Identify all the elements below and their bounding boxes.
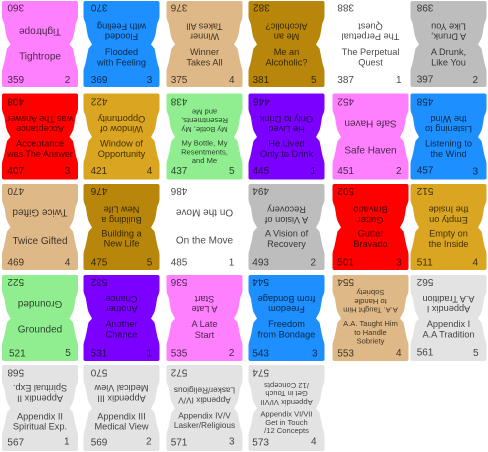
upright text xyxy=(171,319,235,359)
upright text: the Wind xyxy=(430,149,467,159)
upright text: Appendix VI/VII xyxy=(260,409,313,418)
inverted text: Appendix II xyxy=(17,394,63,404)
upright text: Empty on xyxy=(429,228,468,238)
inverted text: 458 xyxy=(416,96,433,107)
upright text xyxy=(252,139,316,177)
upright text: 3 xyxy=(147,75,153,86)
inverted text xyxy=(416,276,475,314)
inverted text: Only to Drink xyxy=(260,114,313,124)
upright text xyxy=(417,228,478,268)
upright text: Get in Touch xyxy=(265,418,308,427)
card: Appendix III Medical View xyxy=(84,365,160,451)
upright text: Winner xyxy=(190,47,219,57)
inverted text xyxy=(90,2,147,42)
upright text xyxy=(337,47,402,86)
inverted text: Empty on xyxy=(429,215,468,225)
upright text xyxy=(337,319,402,359)
upright text xyxy=(171,138,235,177)
upright text: A Late xyxy=(191,319,218,329)
inverted text: Window of xyxy=(100,124,143,134)
inverted text: 522 xyxy=(7,276,24,287)
inverted text xyxy=(252,276,315,314)
upright text: 421 xyxy=(90,166,108,177)
inverted text: Takes All xyxy=(186,21,223,31)
inverted text: 494 xyxy=(252,185,269,196)
inverted text: Sobriety xyxy=(356,288,384,297)
inverted text: 370 xyxy=(90,2,107,12)
card: A Vision of Recovery xyxy=(248,184,324,270)
upright text xyxy=(171,236,235,268)
upright text: 359 xyxy=(7,75,25,86)
upright text: 4 xyxy=(396,348,402,359)
upright text: 535 xyxy=(171,348,188,359)
inverted text: He Lived xyxy=(268,124,305,134)
inverted text: A Drunk, xyxy=(431,32,466,42)
inverted text: Chance xyxy=(106,294,137,304)
upright text xyxy=(91,47,153,86)
inverted text: On the Move xyxy=(175,206,233,218)
upright text: Window of xyxy=(100,139,143,149)
upright text: Flooded xyxy=(105,47,138,57)
inverted text: A.A. Taught Him xyxy=(343,306,398,314)
card: Window of Opportunity xyxy=(84,94,160,180)
upright text: 2 xyxy=(65,75,71,86)
card: Twice Gifted xyxy=(2,184,78,270)
inverted text: 470 xyxy=(7,185,24,196)
upright text: 369 xyxy=(91,75,108,86)
upright text: 381 xyxy=(252,75,270,86)
card: A Drunk, Like You xyxy=(410,1,486,87)
inverted text xyxy=(252,367,313,407)
upright text: On the Move xyxy=(176,236,234,246)
upright text: Safe Haven xyxy=(344,146,397,156)
inverted text: 570 xyxy=(90,367,107,378)
upright text: 437 xyxy=(171,166,188,177)
upright text: Medical View xyxy=(95,421,149,431)
upright text: 457 xyxy=(417,165,434,176)
upright text xyxy=(171,47,235,86)
upright text: 5 xyxy=(311,75,317,86)
upright text: was The Answer xyxy=(6,149,73,159)
inverted text: 452 xyxy=(337,96,354,107)
inverted text xyxy=(170,276,218,314)
inverted text: Grounded xyxy=(18,298,62,309)
upright text: /12 Concepts xyxy=(264,426,309,435)
card: Building a New Life xyxy=(84,184,160,270)
inverted text xyxy=(7,185,68,218)
inverted text: Start xyxy=(194,294,214,304)
card: Appendix VI/VII Get in Touch /12 Concepts xyxy=(248,365,324,451)
inverted text: Appendix III xyxy=(97,394,146,404)
card: The Perpetual Quest xyxy=(332,1,408,87)
upright text xyxy=(252,319,318,359)
upright text: 4 xyxy=(229,75,235,86)
upright text: 469 xyxy=(7,257,25,268)
upright text: 3 xyxy=(396,257,402,268)
inverted text: Appendix I xyxy=(427,304,470,314)
inverted text: My Bottle, My xyxy=(181,125,228,134)
inverted text: 388 xyxy=(337,2,354,12)
card: Appendix I A.A Tradition xyxy=(410,275,486,361)
inverted text: Tightrope xyxy=(19,26,61,37)
upright text: 2 xyxy=(396,166,402,177)
upright text: Appendix II xyxy=(17,411,63,421)
upright text xyxy=(417,319,479,359)
upright text: to Handle xyxy=(354,328,387,337)
upright text xyxy=(7,52,71,86)
upright text: A Vision of xyxy=(265,228,309,238)
inverted text xyxy=(90,185,142,225)
inverted text xyxy=(7,367,67,404)
inverted text xyxy=(416,2,466,42)
upright text: A.A. Taught Him xyxy=(343,319,398,328)
upright text: New Life xyxy=(104,238,139,248)
upright text: Alcoholic? xyxy=(266,58,307,68)
card: Acceptance was The Answer xyxy=(2,94,78,180)
upright text: Gutter xyxy=(358,228,383,238)
inverted text: Safe Haven xyxy=(344,118,397,129)
upright text: 397 xyxy=(417,74,434,86)
inverted text: 572 xyxy=(170,367,187,378)
card: Empty on the Inside xyxy=(410,184,486,270)
upright text: The Perpetual xyxy=(342,47,399,57)
inverted text: Opportunity xyxy=(97,114,145,124)
inverted text xyxy=(252,185,308,225)
inverted text xyxy=(7,276,62,309)
upright text: and Me xyxy=(192,156,217,165)
inverted text: 446 xyxy=(253,96,270,107)
inverted text: Get in Touch xyxy=(265,389,308,398)
inverted text: Alcoholic? xyxy=(266,21,307,31)
card: Me an Alcoholic? xyxy=(248,1,324,87)
inverted text: the Wind xyxy=(430,114,467,124)
inverted text: Gutter xyxy=(358,215,383,225)
inverted text: Appendix IV/V xyxy=(178,395,231,405)
inverted text: Like You xyxy=(431,21,466,31)
card: My Bottle, My Resentments, and Me xyxy=(166,94,242,180)
upright text xyxy=(90,139,153,177)
upright text xyxy=(6,139,73,177)
inverted text: Lasker/Religious xyxy=(174,386,235,396)
upright text: 387 xyxy=(337,75,354,86)
upright text: Appendix IV/V xyxy=(178,411,231,421)
upright text: the Inside xyxy=(429,239,468,249)
inverted text: Winner xyxy=(190,32,219,42)
inverted text xyxy=(416,96,472,134)
upright text: 4 xyxy=(65,257,71,268)
upright text: Quest xyxy=(358,58,383,68)
card: Gutter Bravado xyxy=(332,184,408,270)
upright text xyxy=(7,411,70,448)
inverted text: Freedom xyxy=(268,304,305,314)
inverted text xyxy=(90,367,148,404)
inverted text: 486 xyxy=(170,185,187,196)
card: Flooded with Feeling xyxy=(84,1,160,87)
inverted text: Me an xyxy=(274,32,299,42)
upright text: 475 xyxy=(91,257,108,268)
inverted text: 476 xyxy=(90,185,107,196)
upright text: 1 xyxy=(396,75,402,86)
upright text: A.A Tradition xyxy=(422,330,475,340)
card: Appendix II Spiritual Exp. xyxy=(2,365,78,451)
upright text: 531 xyxy=(90,348,108,359)
upright text xyxy=(91,228,153,268)
upright text xyxy=(91,411,152,448)
inverted text: 382 xyxy=(253,2,270,12)
upright text: 4 xyxy=(472,257,478,268)
upright text: 3 xyxy=(65,166,71,177)
upright text: Takes All xyxy=(186,58,223,68)
inverted text: 568 xyxy=(7,367,24,378)
inverted text: A Late xyxy=(191,304,218,314)
inverted text xyxy=(337,2,399,42)
upright text: 569 xyxy=(91,437,108,448)
upright text: Recovery xyxy=(267,239,306,249)
inverted text xyxy=(170,185,233,218)
inverted text: 398 xyxy=(416,2,433,12)
upright text: 493 xyxy=(252,257,269,268)
upright text: 4 xyxy=(311,436,317,448)
inverted text xyxy=(7,96,74,134)
upright text: Appendix III xyxy=(97,411,146,421)
inverted text: Acceptance xyxy=(16,124,64,134)
upright text xyxy=(337,146,402,177)
card: Grounded xyxy=(2,275,78,361)
inverted text: was The Answer xyxy=(7,114,74,124)
upright text: 5 xyxy=(473,348,479,359)
upright text: 561 xyxy=(417,347,434,358)
inverted text xyxy=(337,185,388,225)
upright text: 2 xyxy=(229,348,235,359)
inverted text: 408 xyxy=(7,96,24,107)
inverted text: 536 xyxy=(170,276,187,287)
upright text: 3 xyxy=(472,166,478,177)
upright text: 5 xyxy=(229,166,235,177)
inverted text: Flooded xyxy=(105,32,138,42)
inverted text: 502 xyxy=(337,185,354,196)
inverted text xyxy=(170,367,235,405)
inverted text xyxy=(253,96,313,134)
inverted text: and Me xyxy=(192,108,217,116)
inverted text: 544 xyxy=(252,276,269,287)
upright text: 2 xyxy=(472,75,478,86)
inverted text: Appendix VI/VII xyxy=(260,398,313,407)
inverted text: /12 Concepts xyxy=(264,381,309,390)
inverted text xyxy=(90,96,145,134)
inverted text xyxy=(416,185,468,225)
inverted text xyxy=(170,96,228,134)
inverted text: Bravado xyxy=(353,205,388,215)
inverted text: 422 xyxy=(90,96,107,107)
upright text: 521 xyxy=(9,348,26,359)
upright text: Sobriety xyxy=(357,336,385,346)
inverted text: Recovery xyxy=(267,205,306,215)
upright text: Grounded xyxy=(18,324,62,336)
upright text: 3 xyxy=(312,348,318,359)
upright text: Appendix I xyxy=(427,319,470,329)
card: Tightrope xyxy=(2,1,78,87)
inverted text: Twice Gifted xyxy=(12,206,68,218)
inverted text: 532 xyxy=(90,276,107,287)
inverted text xyxy=(253,2,307,42)
upright text: Spiritual Exp. xyxy=(13,421,67,431)
card: He Lived Only to Drink xyxy=(248,94,324,180)
upright text: Freedom xyxy=(268,319,305,329)
inverted text: 554 xyxy=(337,276,354,287)
upright text: 511 xyxy=(417,257,433,268)
upright text xyxy=(7,236,71,268)
upright text: Start xyxy=(195,330,215,340)
upright text xyxy=(171,411,235,448)
inverted text: 376 xyxy=(170,2,187,12)
inverted text: 574 xyxy=(252,367,269,378)
inverted text: Resentments, xyxy=(181,116,228,125)
card: A.A. Taught Him to Handle Sobriety xyxy=(332,275,408,361)
upright text: Only to Drink xyxy=(260,149,313,159)
upright text: 5 xyxy=(147,257,153,268)
upright text xyxy=(9,324,71,359)
inverted text: Medical View xyxy=(94,383,148,393)
inverted text: A Vision of xyxy=(264,215,308,225)
upright text: 573 xyxy=(252,437,269,448)
inverted text: 512 xyxy=(416,185,433,196)
inverted text: from Bondage xyxy=(258,294,315,304)
card: Freedom from Bondage xyxy=(248,275,324,361)
upright text xyxy=(417,139,478,177)
upright text: 1 xyxy=(64,436,70,448)
inverted text: 360 xyxy=(7,2,24,12)
upright text: 553 xyxy=(337,348,354,359)
upright text: Opportunity xyxy=(98,149,146,159)
inverted text: 562 xyxy=(416,276,433,287)
card: Safe Haven xyxy=(332,94,408,180)
upright text: Like You xyxy=(431,58,466,68)
upright text: Listening to xyxy=(425,139,472,149)
upright text: My Bottle, My xyxy=(182,138,228,148)
inverted text: A.A Tradition xyxy=(422,294,475,304)
upright text xyxy=(90,319,152,359)
upright text: 567 xyxy=(7,437,25,448)
inverted text: to Handle xyxy=(354,297,387,306)
upright text: Another xyxy=(105,319,138,329)
inverted text: The Perpetual xyxy=(342,32,399,42)
upright text: 501 xyxy=(337,257,354,268)
inverted text xyxy=(7,2,61,37)
upright text: Acceptance xyxy=(16,139,64,149)
upright text xyxy=(337,228,402,268)
upright text: Twice Gifted xyxy=(12,236,68,247)
inverted text: Another xyxy=(105,304,138,314)
inverted text xyxy=(90,276,138,314)
upright text: with Feeling xyxy=(96,58,146,68)
upright text xyxy=(417,47,478,86)
upright text: Tightrope xyxy=(19,52,61,63)
upright text: Resentments, xyxy=(181,148,228,156)
card: Winner Takes All xyxy=(166,1,242,87)
upright text: 1 xyxy=(146,348,152,359)
inverted text xyxy=(170,2,223,42)
upright text: from Bondage xyxy=(258,330,315,340)
card: Listening to the Wind xyxy=(410,94,486,180)
inverted text: 438 xyxy=(170,96,187,107)
inverted text xyxy=(337,276,398,314)
card: Appendix IV/V Lasker/Religious xyxy=(166,365,242,451)
upright text: 485 xyxy=(171,257,188,268)
upright text xyxy=(252,228,316,268)
upright text xyxy=(252,409,317,448)
upright text: Lasker/Religious xyxy=(174,420,235,430)
upright text: 2 xyxy=(310,257,316,268)
upright text xyxy=(252,47,317,86)
inverted text: Quest xyxy=(358,21,383,31)
upright text: A Drunk, xyxy=(431,47,466,57)
inverted text: New Life xyxy=(104,205,139,215)
upright text: 445 xyxy=(252,166,270,177)
inverted text: Spiritual Exp. xyxy=(13,383,67,393)
upright text: 5 xyxy=(65,348,71,359)
upright text: Building a xyxy=(101,228,143,238)
upright text: 543 xyxy=(252,348,269,359)
upright text: 451 xyxy=(337,166,354,177)
upright text: He Lived xyxy=(268,139,305,149)
upright text: 375 xyxy=(171,75,188,86)
inverted text: Listening to xyxy=(425,124,472,134)
upright text: 407 xyxy=(7,166,25,177)
upright text: 3 xyxy=(229,436,235,448)
upright text: Chance xyxy=(106,330,137,340)
card: A Late Start xyxy=(166,275,242,361)
upright text: 2 xyxy=(146,436,152,448)
inverted text: the Inside xyxy=(429,205,468,215)
inverted text xyxy=(337,96,397,129)
upright text: 1 xyxy=(310,166,316,177)
upright text: 571 xyxy=(171,437,188,448)
upright text: Bravado xyxy=(353,239,388,249)
upright text: Me an xyxy=(274,47,299,57)
upright text: 4 xyxy=(147,166,153,177)
inverted text: with Feeling xyxy=(97,21,147,31)
card: Another Chance xyxy=(84,275,160,361)
upright text: 1 xyxy=(229,257,235,268)
inverted text: Building a xyxy=(100,215,142,225)
card: On the Move xyxy=(166,184,242,270)
